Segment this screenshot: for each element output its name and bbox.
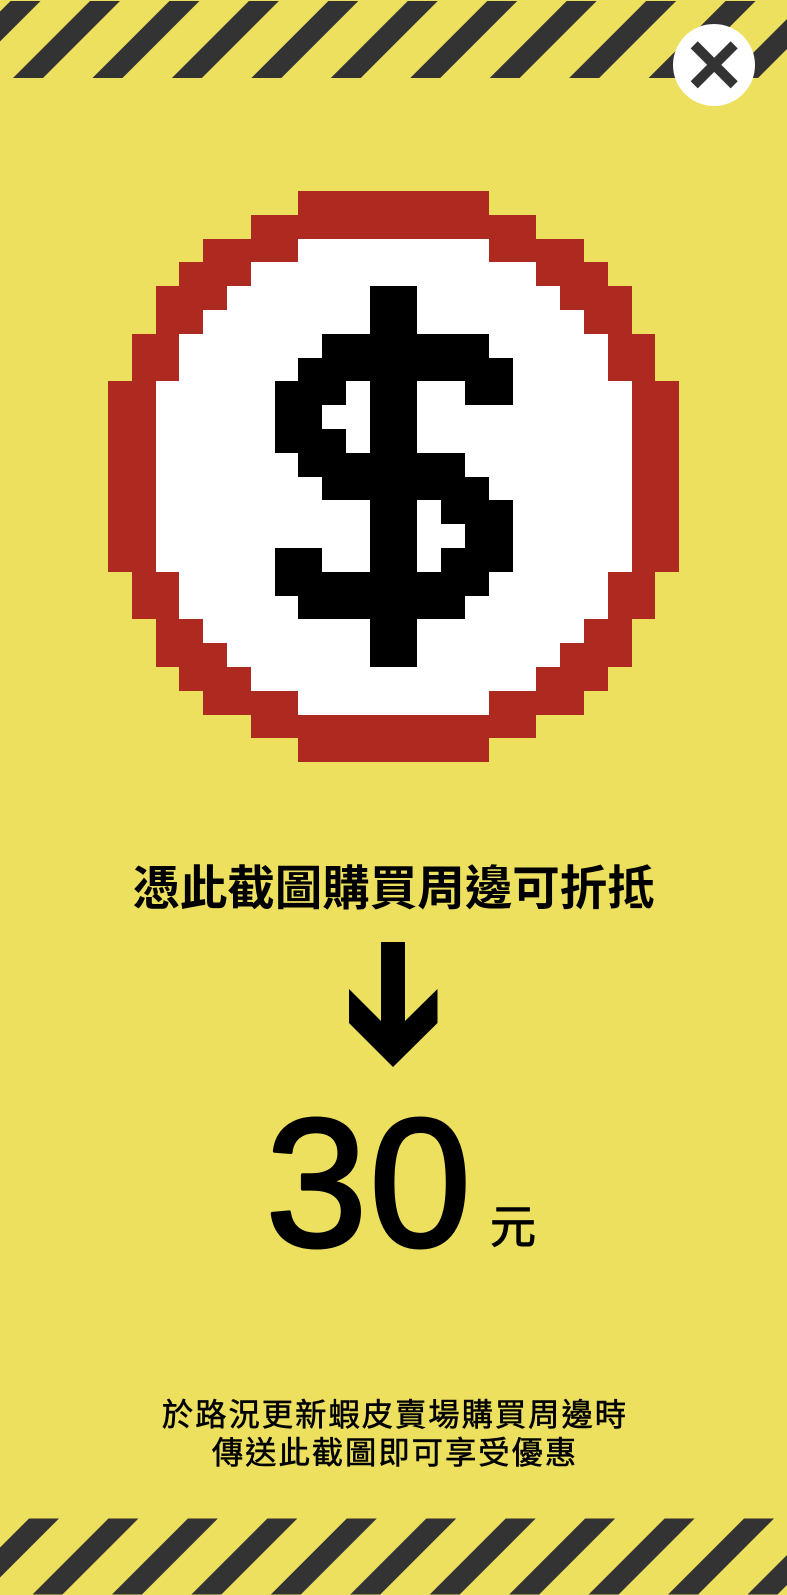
coin red ring (108, 191, 679, 762)
discount amount (266, 1080, 536, 1285)
hazard stripes: top band (0, 1, 787, 78)
dollar sign (275, 286, 513, 667)
coin white face (156, 239, 632, 715)
hazard stripes: bottom band (0, 1518, 787, 1594)
icon: close button (673, 24, 755, 106)
instruction line 2: 傳送此截圖即可享受優惠 (212, 1436, 578, 1470)
number 30: 30 (266, 1080, 473, 1285)
instruction line 1: 於路況更新蝦皮賣場購買周邊時 (162, 1398, 628, 1432)
unit: yuan: 元 (490, 1201, 536, 1253)
arrow: down (349, 942, 438, 1067)
instruction text (162, 1398, 628, 1470)
icon: pixel-art dollar coin (108, 191, 679, 762)
heading: 憑此截圖購買周邊可折抵 (132, 863, 655, 916)
